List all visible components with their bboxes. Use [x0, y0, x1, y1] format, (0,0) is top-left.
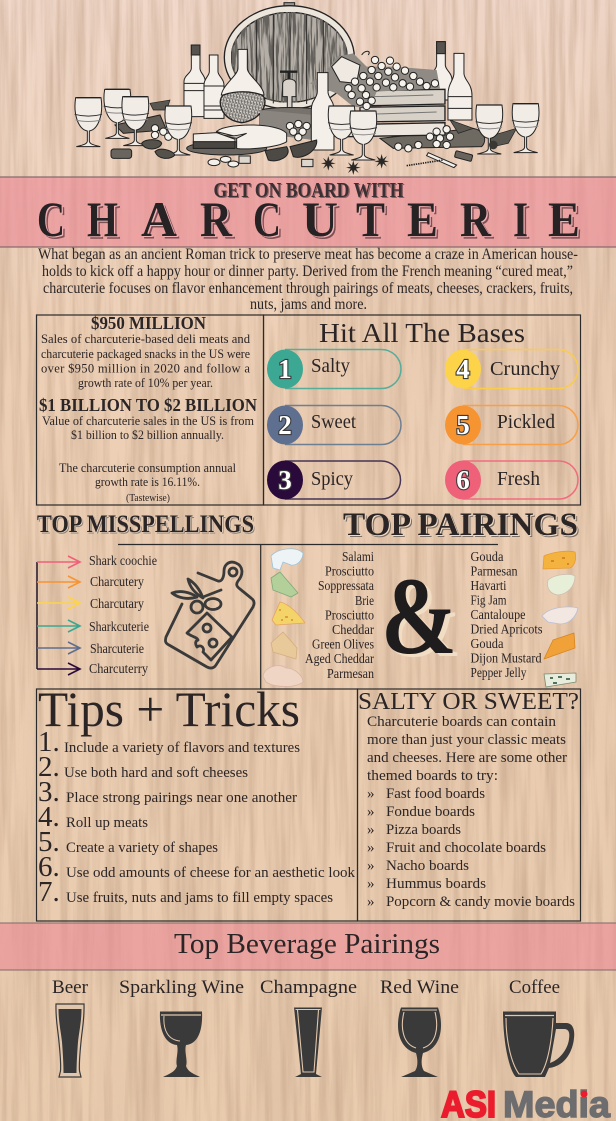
- heading: top misspellings: TOP MISSPELLINGS: [37, 511, 254, 538]
- pill 3 spicy: 3: [278, 465, 292, 495]
- icon: green cheese: [271, 572, 298, 597]
- panel: tips and tricks: [36, 681, 358, 921]
- pill 2 sweet: 2: [278, 410, 292, 440]
- heading: charcuterie: E: [408, 192, 439, 248]
- title banner: [0, 177, 616, 249]
- illustration: barrel, wine, cheese and grapes: [75, 3, 539, 175]
- panel: hit all the bases: [264, 315, 580, 505]
- pill 1 salty: Salty: [311, 355, 350, 377]
- stat description: charcuterie packaged snacks in the US were: [41, 347, 250, 361]
- heading: charcuterie: H: [90, 193, 121, 249]
- tip 1: [38, 726, 300, 758]
- heading: Top Beverage Pairings: [174, 928, 440, 960]
- stat description: [41, 332, 251, 390]
- stat: 950 million: $950 MILLION: [91, 313, 206, 333]
- panel: salty or sweet: [358, 689, 580, 921]
- pairing list: meats and cheeses: Soppressata: [318, 578, 374, 593]
- misspelling labels: Shark coochie: [89, 553, 157, 568]
- board list: »: [367, 840, 374, 856]
- ampersand: &: [384, 558, 462, 680]
- figs and small grapes: [150, 100, 517, 161]
- beverage: sparkling wine: Sparkling Wine: [119, 977, 244, 998]
- misspelling labels: Charcutery: [90, 574, 144, 589]
- tip 6: 6.: [38, 851, 60, 883]
- paragraph: Charcuterie boards can contain: [367, 714, 557, 730]
- beverage: red wine: Red Wine: [380, 977, 459, 998]
- heading: charcuterie: C: [256, 193, 284, 249]
- pill 4 crunchy: Crunchy: [490, 358, 560, 380]
- beverage: beer: Beer: [52, 977, 89, 998]
- logo: asi media: [441, 1084, 610, 1121]
- center bottle: [311, 73, 334, 150]
- tip 4: 4.: [38, 801, 60, 833]
- stat description: over $950 million in 2020 and follow a: [41, 362, 250, 376]
- heading: charcuterie: I: [513, 191, 528, 247]
- board list: Fruit and chocolate boards: [386, 840, 546, 856]
- heading: charcuterie: R: [460, 191, 492, 247]
- glasses: [75, 89, 539, 160]
- pill 5 pickled: [445, 406, 578, 444]
- beverage: coffee: Coffee: [509, 977, 560, 998]
- pairing list: accompaniments: Gouda: [470, 636, 504, 651]
- pairing list: accompaniments: Gouda: [470, 549, 504, 564]
- misspelling arrows: [37, 556, 80, 675]
- icon: brie: [271, 549, 303, 570]
- heading: get on board with: GET ON BOARD WITH: [214, 178, 404, 202]
- crate: [347, 89, 445, 137]
- section dividers: [118, 544, 498, 689]
- heading: charcuterie: E: [548, 191, 580, 247]
- pairing list: accompaniments: [470, 549, 542, 680]
- icon: cutting board with cheese and olives: [165, 562, 254, 668]
- pill 2 sweet: Sweet: [311, 411, 356, 433]
- paragraph: more than just your classic meats: [367, 732, 566, 748]
- heading: charcuterie: A: [144, 193, 180, 249]
- tip 6: Use odd amounts of cheese for an aesthetic look: [66, 865, 356, 881]
- pill 1 salty: 1: [278, 354, 292, 384]
- pill 5 pickled: 5: [456, 410, 470, 440]
- paragraph: [367, 714, 567, 784]
- pairing list: accompaniments: Parmesan: [470, 563, 518, 578]
- stat: growth rate: [59, 461, 236, 489]
- heading: charcuterie: A: [141, 191, 177, 247]
- heading: charcuterie: [37, 191, 583, 249]
- heading: charcuterie: E: [551, 193, 583, 249]
- board list: Pizza boards: [386, 822, 461, 838]
- tip 3: Place strong pairings near one another: [66, 790, 297, 806]
- board list: Fast food boards: [386, 786, 485, 802]
- olives, corks and spices: [111, 140, 498, 175]
- panel: statistics: [36, 313, 264, 505]
- beverage: sparkling wine: [119, 977, 244, 1077]
- heading: get on board with: GET ON BOARD WITH: [215, 179, 405, 203]
- heading: charcuterie: E: [549, 192, 581, 248]
- pill 1 salty: [267, 350, 401, 388]
- board list: Nacho boards: [386, 858, 469, 874]
- beverage: beer: [52, 977, 89, 1077]
- pairing list: meats and cheeses: Brie: [355, 593, 374, 608]
- bottles: [184, 42, 472, 120]
- heading: charcuterie: C: [40, 193, 68, 249]
- pairing list: accompaniments: Cantaloupe: [470, 607, 526, 622]
- boards: [115, 110, 485, 148]
- tip 2: [38, 751, 248, 783]
- heading: charcuterie: R: [463, 193, 494, 249]
- tip 5: [38, 826, 218, 858]
- pairing list: meats and cheeses: Parmesan: [327, 666, 374, 681]
- heading: charcuterie: I: [516, 193, 531, 249]
- tip 2: 2.: [38, 751, 60, 783]
- pill 2 sweet: [267, 406, 401, 444]
- tip 7: Use fruits, nuts and jams to fill empty spaces: [66, 890, 333, 906]
- tip 6: [38, 851, 356, 883]
- pairing list: accompaniments: Fig Jam: [470, 592, 507, 607]
- beverage: coffee: [503, 977, 574, 1077]
- tip 5: Create a variety of shapes: [66, 840, 218, 856]
- tip 1: 1.: [38, 726, 60, 758]
- tip 4: Roll up meats: [66, 815, 148, 831]
- pill 3 spicy: [267, 460, 400, 500]
- heading: charcuterie: H: [87, 191, 118, 247]
- pairing list: accompaniments: Havarti: [470, 578, 507, 593]
- icon: blue cheese: [544, 673, 576, 687]
- cheese: [187, 125, 287, 155]
- pill 6 fresh: Fresh: [497, 468, 540, 490]
- pairing list: meats and cheeses: Green Olives: [312, 637, 374, 652]
- heading: charcuterie: U: [305, 193, 341, 249]
- heading: charcuterie: C: [38, 192, 66, 248]
- heading: charcuterie: R: [461, 192, 493, 248]
- stat description: Value of charcuterie sales in the US is from: [42, 414, 254, 428]
- beverage: champagne: Champagne: [260, 977, 357, 998]
- tip 3: [38, 776, 297, 808]
- pill 6 fresh: [445, 460, 578, 500]
- heading: charcuterie: U: [303, 192, 339, 248]
- intro paragraph: What began as an ancient Roman trick to preserve meat has become a craze in American house-: [38, 246, 578, 263]
- intro paragraph: charcuterie focuses on flavor enhancement through pairings of meats, cheeses, crackers, fruits,: [43, 280, 573, 297]
- barrel: [224, 3, 354, 125]
- tip 4: [38, 801, 148, 833]
- tip 7: 7.: [38, 876, 60, 908]
- heading: top misspellings: TOP MISSPELLINGS: [38, 512, 256, 540]
- misspelling labels: Charcuterry: [89, 661, 148, 676]
- pill 5 pickled: Pickled: [497, 411, 555, 433]
- pairing list: meats and cheeses: Prosciutto: [325, 607, 374, 622]
- pairing list: accompaniments: Dijon Mustard: [470, 650, 542, 665]
- heading: charcuterie: U: [302, 191, 338, 247]
- heading: charcuterie: H: [88, 192, 119, 248]
- stat description: $1 billion to $2 billion annually.: [71, 428, 224, 442]
- pairing list: meats and cheeses: [305, 549, 374, 681]
- board list: Fondue boards: [386, 804, 475, 820]
- heading: SALTY OR SWEET?: [358, 689, 579, 715]
- tip 3: 3.: [38, 776, 60, 808]
- misspelling labels: Sharkcuterie: [89, 619, 149, 634]
- pairing list: accompaniments: Dried Apricots: [470, 621, 542, 636]
- intro paragraph: nuts, jams and more.: [250, 296, 367, 313]
- board list: »: [367, 804, 374, 820]
- pairing list: meats and cheeses: Cheddar: [332, 622, 374, 637]
- icon: fig jam dish: [542, 607, 578, 624]
- paragraph: themed boards to try:: [367, 768, 498, 784]
- heading: top pairings: TOP PAIRINGS: [343, 507, 578, 543]
- heading: charcuterie: E: [407, 191, 438, 247]
- pill 4 crunchy: [445, 350, 578, 388]
- board list: Popcorn & candy movie boards: [386, 894, 575, 910]
- pairing list: meats and cheeses: Salami: [342, 549, 374, 564]
- heading: charcuterie: I: [514, 192, 529, 248]
- board list: »: [367, 858, 374, 874]
- heading: top pairings: TOP PAIRINGS: [345, 509, 580, 545]
- stat description: growth rate of 10% per year.: [78, 376, 213, 390]
- stat: 1 to 2 billion: $1 BILLION TO $2 BILLION: [39, 395, 257, 415]
- pairing list: accompaniments: Pepper Jelly: [470, 665, 527, 680]
- heading: charcuterie: A: [142, 192, 178, 248]
- source: (Tastewise): [126, 493, 170, 504]
- tip 7: [38, 876, 333, 908]
- heading: charcuterie: T: [359, 193, 388, 249]
- beverage: red wine: [380, 977, 459, 1077]
- board list: »: [367, 876, 374, 892]
- tip 2: Use both hard and soft cheeses: [64, 765, 248, 781]
- heading: charcuterie: R: [201, 192, 234, 248]
- heading: charcuterie: C: [254, 192, 282, 248]
- intro paragraph: holds to kick off a happy hour or dinner party. Derived from the French meaning “cured meat,”: [42, 263, 573, 280]
- heading: charcuterie: T: [356, 191, 385, 247]
- heading: charcuterie: R: [200, 191, 233, 247]
- ampersand: &: [381, 555, 457, 677]
- heading: top misspellings: TOP MISSPELLINGS: [38, 512, 255, 539]
- board list: [367, 786, 575, 910]
- board list: »: [367, 822, 374, 838]
- heading: charcuterie: E: [410, 193, 441, 249]
- heading: Tips + Tricks: [38, 681, 300, 737]
- stat: growth rate: growth rate is 16.11%.: [95, 475, 200, 489]
- misspelling labels: Charcutary: [90, 596, 144, 611]
- grapes: [310, 51, 440, 110]
- tip 1: Include a variety of flavors and textures: [64, 740, 300, 756]
- flask: [220, 92, 265, 123]
- icon: apricot wedge: [544, 633, 575, 659]
- heading: charcuterie: R: [203, 193, 235, 249]
- board list: Hummus boards: [386, 876, 486, 892]
- misspelling labels: [89, 553, 157, 676]
- intro paragraph: [38, 246, 578, 313]
- board list: »: [367, 894, 374, 910]
- stat description: Sales of charcuterie-based deli meats and: [41, 332, 251, 346]
- heading: Hit All The Bases: [319, 317, 525, 348]
- icon: sliced meat: [263, 666, 303, 686]
- pairing list: meats and cheeses: Prosciutto: [325, 564, 374, 579]
- beverage: champagne: [260, 977, 357, 1077]
- icon: gouda: [543, 551, 576, 569]
- pairing list: meats and cheeses: Aged Cheddar: [305, 651, 374, 666]
- pill 4 crunchy: 4: [456, 354, 470, 384]
- stat: growth rate: The charcuterie consumption annual: [59, 461, 236, 475]
- heading: charcuterie: T: [357, 192, 386, 248]
- cheese icons: right column: [542, 551, 578, 687]
- pill 6 fresh: 6: [456, 465, 470, 495]
- cheese icons: left column: [263, 549, 305, 686]
- pill 3 spicy: Spicy: [311, 468, 353, 490]
- icon: yellow cheese: [272, 602, 305, 625]
- icon: aged cheese: [271, 632, 297, 659]
- heading: charcuterie: C: [253, 191, 281, 247]
- beverage banner: [0, 923, 616, 970]
- stat description: [42, 414, 254, 442]
- board list: »: [367, 786, 374, 802]
- tip 5: 5.: [38, 826, 60, 858]
- misspelling labels: Sharcuterie: [90, 641, 144, 656]
- heading: charcuterie: C: [37, 191, 65, 247]
- icon: havarti: [547, 574, 575, 595]
- paragraph: and cheeses. Here are some other: [367, 750, 567, 766]
- heading: top pairings: TOP PAIRINGS: [344, 508, 579, 544]
